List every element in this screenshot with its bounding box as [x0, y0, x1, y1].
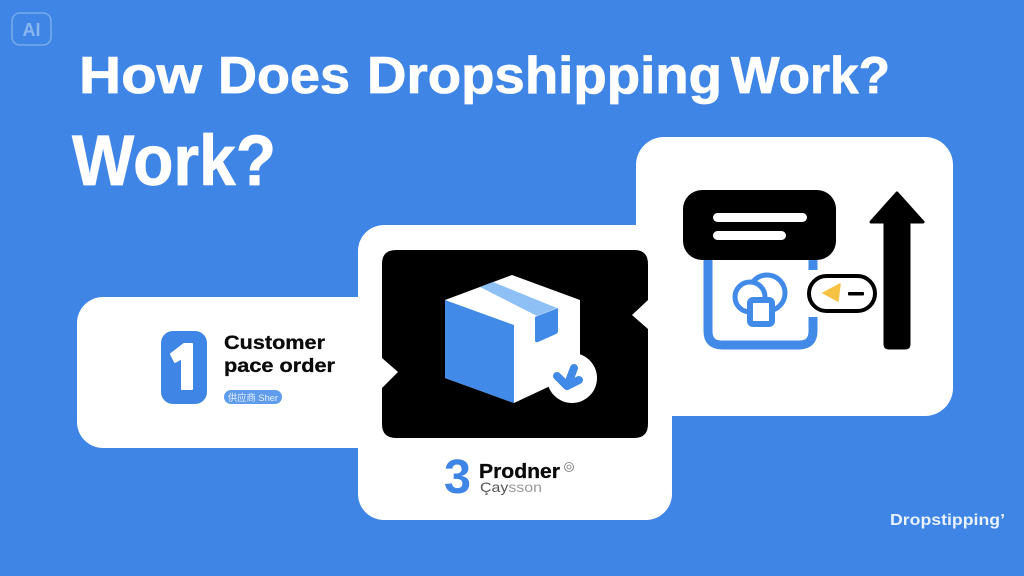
title	[79, 47, 890, 105]
tag: supplier label	[224, 390, 282, 404]
text: producer name	[479, 461, 574, 495]
icon: blue document	[708, 250, 813, 345]
text: producer name: Çaysson	[480, 479, 542, 495]
text: producer name: Prodner	[479, 461, 560, 483]
text: customer place order	[224, 333, 336, 377]
text: customer place order: pace order	[224, 356, 336, 377]
panel: step 3 producer	[358, 225, 672, 520]
badge: AI	[12, 13, 51, 45]
brand: dropshipping: Dropstipping’	[890, 512, 1005, 529]
title: repeated word: Work?	[72, 122, 276, 201]
badge: AI: AI	[22, 20, 40, 40]
panel: step 1 customer	[77, 297, 397, 448]
icon: number 1	[161, 331, 207, 404]
title: Does	[218, 47, 350, 105]
icon: package	[445, 275, 597, 403]
title: How	[79, 47, 203, 105]
title: Dropshipping	[367, 47, 722, 105]
panel: right card	[636, 137, 953, 416]
panel: right card contents	[683, 190, 923, 348]
title: Work?	[731, 47, 890, 105]
ticket: black backdrop	[382, 250, 648, 438]
toggle pill	[809, 276, 875, 311]
message bubble	[683, 190, 836, 260]
number 3: 3	[444, 451, 471, 504]
tag: supplier label: 供应商 Sher	[228, 392, 278, 404]
text: customer place order: Customer	[224, 333, 326, 354]
arrow: up	[871, 193, 923, 348]
